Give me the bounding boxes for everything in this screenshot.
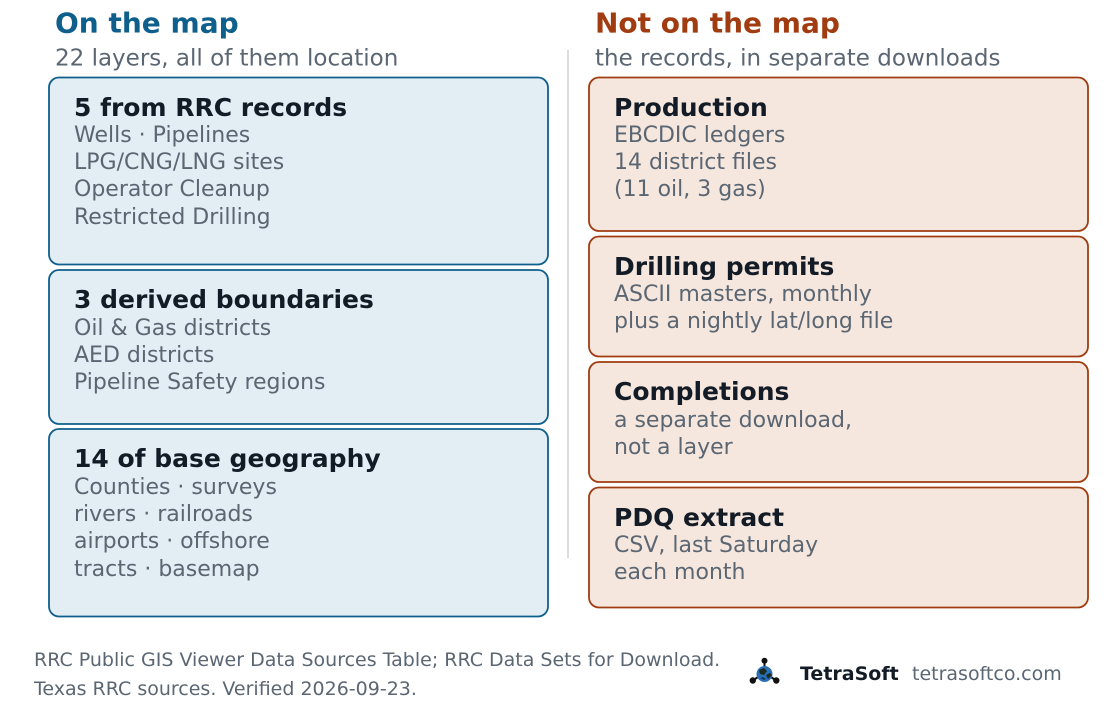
panel: Production: Production (614, 93, 768, 122)
source note: Texas RRC sources. Verified 2026-09-23. (33, 678, 417, 700)
panel: 5 from RRC records: Wells · Pipelines (74, 123, 250, 148)
panel: Completions: Completions (614, 377, 789, 406)
panel: PDQ extract (589, 488, 1088, 608)
subheading: not on the map: the records, in separate downloads (595, 46, 1000, 72)
panel: Production (589, 78, 1088, 231)
panel: 14 of base geography: airports · offshore (74, 529, 270, 554)
panel: Drilling permits: plus a nightly lat/long file (614, 309, 893, 334)
panel: 5 from RRC records: Restricted Drilling (74, 205, 271, 230)
panel: 14 of base geography: rivers · railroads (74, 502, 253, 527)
panel: 14 of base geography: Counties · surveys (74, 475, 277, 500)
panel: 14 of base geography (49, 429, 548, 616)
brand name: TetraSoft (800, 663, 899, 685)
panel: Drilling permits (589, 236, 1088, 356)
panel: 3 derived boundaries: Oil & Gas districts (74, 316, 271, 341)
subheading: on the map: 22 layers, all of them location (55, 46, 398, 72)
panel: Drilling permits: ASCII masters, monthly (614, 282, 872, 307)
icon: TetraSoft logo (750, 658, 780, 684)
source note: RRC Public GIS Viewer Data Sources Table; RRC Data Sets for Download. (34, 649, 720, 671)
panel: PDQ extract: PDQ extract (614, 503, 784, 532)
panel: 3 derived boundaries: AED districts (74, 343, 214, 368)
heading: on the map: On the map (55, 6, 239, 40)
panel: Completions (589, 362, 1088, 482)
panel: 14 of base geography: 14 of base geography (74, 444, 381, 473)
panel: Production: 14 district files (614, 150, 777, 175)
brand url: tetrasoftco.com (912, 663, 1062, 685)
panel: Production: EBCDIC ledgers (614, 123, 785, 148)
panel: 3 derived boundaries: Pipeline Safety regions (74, 370, 326, 395)
panel: 14 of base geography: tracts · basemap (74, 557, 260, 582)
heading: not on the map: Not on the map (595, 6, 840, 40)
source note (33, 649, 720, 700)
panel: 5 from RRC records: Operator Cleanup (74, 177, 270, 202)
panel: Production: (11 oil, 3 gas) (614, 177, 766, 202)
panel: Completions: a separate download, (614, 408, 852, 433)
panel: PDQ extract: each month (614, 560, 745, 585)
panel: 5 from RRC records: LPG/CNG/LNG sites (74, 150, 284, 175)
panel: PDQ extract: CSV, last Saturday (614, 533, 818, 558)
panel: 5 from RRC records (49, 78, 548, 264)
panel: 3 derived boundaries: 3 derived boundaries (74, 285, 374, 314)
panel: 3 derived boundaries (49, 270, 548, 424)
panel: 5 from RRC records: 5 from RRC records (74, 93, 347, 122)
panel: Completions: not a layer (614, 435, 734, 460)
panel: Drilling permits: Drilling permits (614, 252, 834, 281)
